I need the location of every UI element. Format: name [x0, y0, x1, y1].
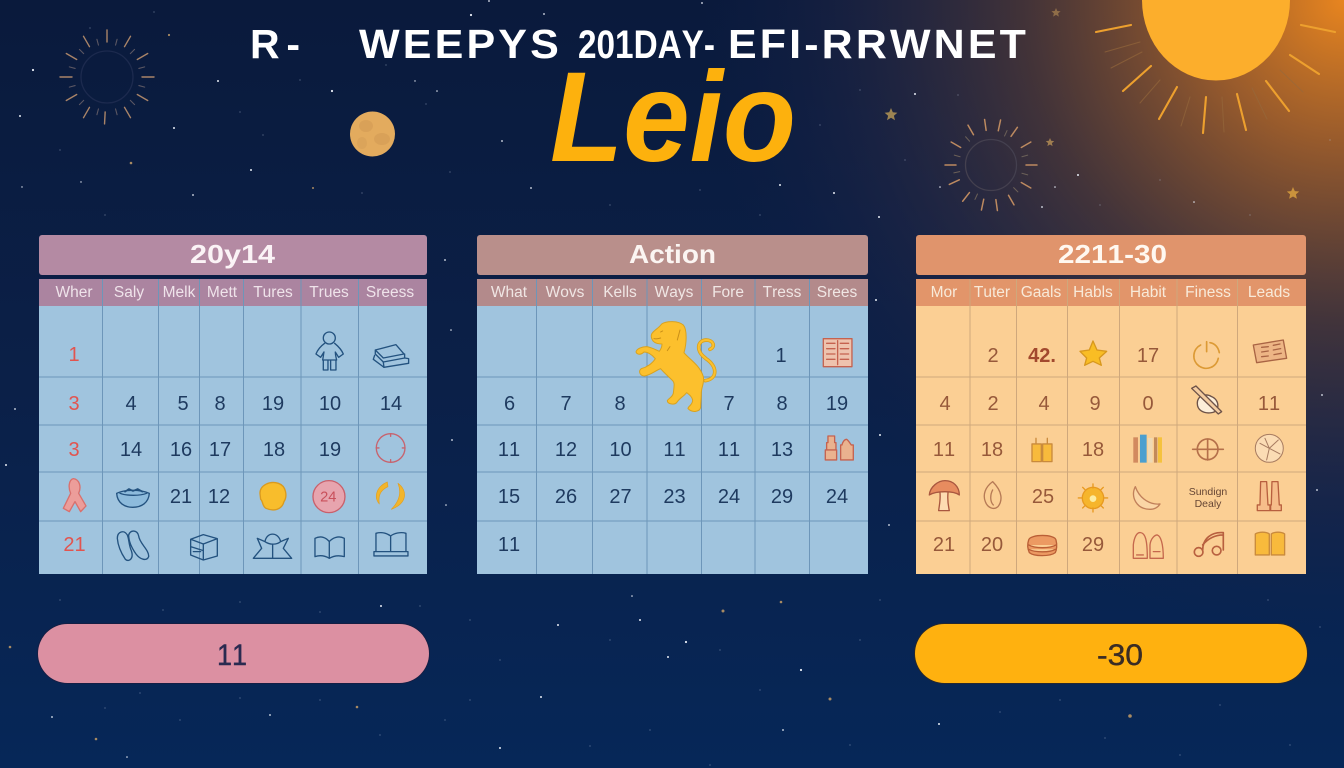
icon: sitting figure	[253, 534, 292, 558]
icon: bowl	[117, 489, 149, 507]
weekday header row: Saly	[114, 284, 144, 301]
calendar title bar: Action	[629, 239, 716, 269]
date numbers: 18	[1082, 439, 1104, 461]
date numbers: 21	[170, 486, 192, 508]
heading: top title line: R -	[250, 21, 300, 67]
date numbers: 0	[1142, 393, 1154, 415]
date numbers: 29	[1082, 534, 1104, 556]
icon: crescent moon	[1133, 487, 1160, 509]
icons: right calendar	[929, 340, 1287, 558]
date numbers: 8	[776, 393, 788, 415]
date numbers: 13	[771, 439, 793, 461]
date numbers: 10	[319, 393, 341, 415]
date numbers: 1	[775, 345, 787, 367]
icon: clock ring	[376, 434, 405, 462]
date numbers: 21	[63, 534, 86, 556]
date numbers: 24	[826, 486, 848, 508]
heading: Leio: Leio	[550, 46, 796, 189]
date numbers: 6	[504, 393, 515, 415]
icon: person	[316, 332, 343, 370]
icon: totems	[1257, 482, 1281, 511]
date numbers: 12	[208, 486, 230, 508]
weekday header row: Mor	[931, 284, 957, 301]
date numbers: 4	[939, 393, 951, 415]
icon: gold book	[1255, 532, 1285, 555]
date numbers: 2	[987, 345, 999, 367]
date numbers: 1	[68, 344, 80, 366]
icon: music note	[1194, 533, 1223, 556]
background golden stars	[9, 34, 1132, 740]
heading: top title line	[250, 21, 1029, 67]
icon: power ring	[1194, 342, 1219, 368]
label: small cell text	[1189, 486, 1227, 510]
icon: crosshair	[1193, 439, 1223, 460]
date numbers: 8	[614, 393, 626, 415]
date numbers: 11	[663, 439, 686, 461]
weekday header row: Melk	[163, 284, 196, 301]
weekday header row: Tures	[253, 284, 293, 301]
calendar title bar	[477, 235, 868, 275]
date numbers: 11	[933, 439, 955, 461]
date numbers: 19	[319, 439, 341, 461]
weekday header row: Wher	[55, 284, 93, 301]
date numbers: 19	[826, 393, 848, 415]
date numbers: 20	[981, 534, 1003, 556]
icon: left sunburst	[60, 30, 154, 124]
date numbers: 25	[1032, 486, 1054, 508]
icon: spiky sun	[1078, 484, 1108, 512]
icon: large sun	[1096, 0, 1335, 133]
calendar title bar: 2211-30	[1058, 239, 1167, 269]
icon: two figures	[1133, 533, 1163, 558]
date numbers: 11	[498, 534, 520, 556]
date numbers: 8	[214, 393, 226, 415]
date numbers: 19	[262, 393, 284, 415]
heading: top title line: EFI-RRWNET	[728, 21, 1029, 67]
icon: flame	[984, 482, 1001, 508]
pill: left: 11	[217, 639, 247, 672]
heading: top title line: 201DAY-	[578, 23, 715, 67]
weekday header row: Srees	[817, 284, 857, 301]
date numbers	[63, 344, 402, 556]
weekday header row: Trues	[309, 284, 349, 301]
icon: right sunburst	[945, 119, 1037, 211]
date numbers: 26	[555, 486, 577, 508]
weekday header row: Kells	[603, 284, 637, 301]
icon: yellow head	[260, 483, 286, 510]
pill: right: -30	[1097, 639, 1143, 672]
weekday header row: What	[491, 284, 528, 301]
date numbers: 2	[987, 393, 999, 415]
icon: feet	[117, 531, 149, 560]
weekday header row: Wovs	[546, 284, 585, 301]
date numbers: 14	[120, 439, 142, 461]
icon: stacked books	[373, 345, 409, 367]
weekday header row: Gaals	[1021, 284, 1061, 301]
label: small cell text: Sundign	[1189, 486, 1227, 498]
calendar grid	[39, 279, 427, 574]
decorative gold stars	[885, 8, 1299, 199]
date numbers: 11	[498, 439, 520, 461]
calendar title bar: 20y14	[190, 239, 276, 269]
weekday header row: Habit	[1130, 284, 1167, 301]
calendar title bar	[916, 235, 1306, 275]
date numbers: 5	[177, 393, 189, 415]
icon: cracked ball	[1255, 434, 1283, 462]
icon: mushroom	[929, 481, 959, 511]
icon: red book	[823, 339, 852, 367]
date numbers	[933, 345, 1280, 556]
panel: right calendar	[916, 235, 1306, 574]
date numbers: 16	[170, 439, 192, 461]
icons: left calendar	[63, 332, 409, 560]
date numbers: 7	[723, 393, 735, 415]
date numbers: 21	[933, 534, 955, 556]
calendar grid	[477, 279, 868, 574]
heading: top title line: WEEPYS	[359, 21, 562, 67]
weekday header row: Fore	[712, 284, 744, 301]
icon: pencil and blob	[1192, 386, 1222, 414]
date numbers: 11	[718, 439, 740, 461]
date numbers	[498, 345, 848, 556]
icon: file box	[191, 535, 217, 560]
weekday header row: Habls	[1073, 284, 1113, 301]
weekday header row: Tuter	[974, 284, 1010, 301]
date numbers: 12	[555, 439, 577, 461]
icon: book row	[1133, 435, 1162, 463]
date numbers: 11	[1258, 393, 1280, 415]
weekday header row: Sreess	[366, 284, 414, 301]
icon: star	[1080, 341, 1107, 365]
label: small cell text: Dealy	[1195, 498, 1222, 510]
weekday header row	[39, 279, 427, 306]
date numbers: 10	[609, 439, 632, 461]
date numbers: 17	[209, 439, 231, 461]
date numbers: 15	[498, 486, 520, 508]
date numbers: 29	[771, 486, 793, 508]
panel: middle calendar	[477, 235, 868, 574]
weekday header row	[477, 279, 868, 306]
icon: lion	[636, 322, 715, 411]
icon: bottles	[1032, 438, 1052, 462]
icons: middle calendar	[636, 322, 853, 460]
date numbers: 4	[125, 393, 137, 415]
weekday header row: Leads	[1248, 284, 1290, 301]
date numbers: 9	[1089, 393, 1101, 415]
date numbers: 24	[718, 486, 740, 508]
date numbers: 7	[560, 393, 572, 415]
date numbers: 18	[263, 439, 285, 461]
icon: jars	[825, 436, 853, 460]
weekday header row: Ways	[655, 284, 694, 301]
weekday header row: Finess	[1185, 284, 1231, 301]
date numbers: 3	[68, 393, 80, 415]
date numbers: 42.	[1028, 345, 1056, 367]
date numbers: 4	[1038, 393, 1050, 415]
icon: badge	[313, 481, 345, 513]
date numbers: 14	[380, 393, 402, 415]
weekday header row	[916, 279, 1306, 306]
pill: right	[914, 623, 1308, 684]
icon: moon	[350, 112, 395, 156]
date numbers: 18	[981, 439, 1003, 461]
panel: left calendar	[39, 235, 427, 574]
icon: yellow arcs	[376, 482, 405, 509]
date numbers: 23	[663, 486, 686, 508]
calendar grid	[916, 279, 1306, 574]
date numbers: 27	[609, 486, 632, 508]
weekday header row: Tress	[763, 284, 802, 301]
pill: left	[37, 623, 430, 684]
icon: open tablet book	[1253, 340, 1287, 363]
calendar title bar	[39, 235, 427, 275]
icon: ribbon	[63, 479, 86, 512]
date numbers: 17	[1137, 345, 1159, 367]
date numbers: 3	[68, 439, 80, 461]
icon: book on stand	[374, 533, 408, 556]
icon: pancakes	[1028, 535, 1057, 556]
weekday header row: Mett	[207, 284, 238, 301]
icon: open book	[315, 537, 344, 558]
icon: badge: 24	[320, 490, 336, 506]
